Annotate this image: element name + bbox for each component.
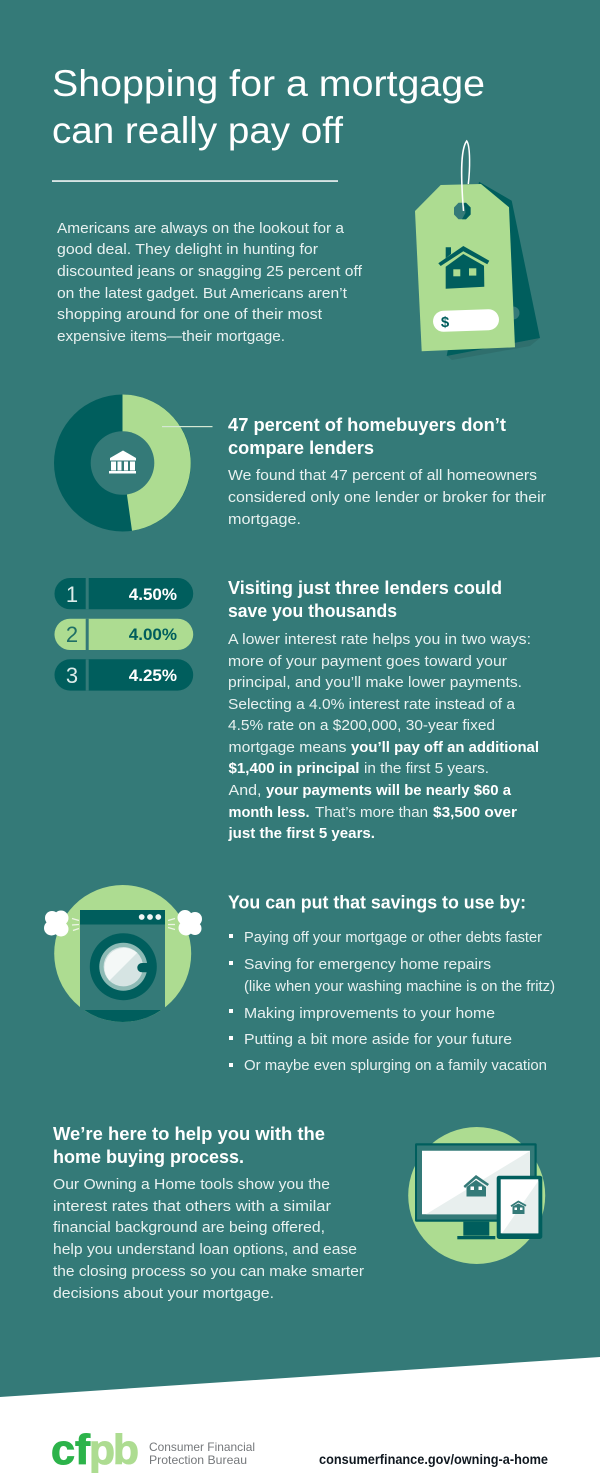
intro text: discounted jeans or snagging 25 percent off: [57, 263, 363, 280]
icon: price tag: [415, 141, 540, 360]
logo: cfpb: c: [51, 1426, 75, 1473]
intro text: Americans are always on the lookout for a: [57, 220, 345, 237]
logo wordmark: Protection Bureau: [149, 1453, 247, 1467]
section: three lenders body: 4.5% rate on a $200,000, 30-year fixed: [228, 717, 495, 734]
savings list: Making improvements to your home: [244, 1005, 495, 1022]
logo: cfpb: p: [89, 1426, 115, 1473]
section: three lenders body: more of your payment goes toward your: [228, 653, 507, 670]
dollar field: [433, 309, 499, 332]
intro text: shopping around for one of their most: [57, 306, 323, 323]
section: three lenders body: mortgage means: [228, 739, 346, 756]
savings list: Putting a bit more aside for your future: [244, 1031, 512, 1048]
icon: computer and tablet: [408, 1127, 545, 1264]
icon: bank: [109, 450, 136, 474]
section: help heading: We’re here to help you with the: [53, 1124, 325, 1144]
section: help heading: [53, 1124, 325, 1167]
section: help body: the closing process so you can make smarter: [53, 1263, 364, 1280]
section: help body: financial background are being offered,: [53, 1219, 325, 1236]
section: three lenders body: your payments will be nearly $60 a: [266, 782, 512, 799]
logo: cfpb: [51, 1426, 139, 1473]
pill 2: 4.00%: [129, 625, 177, 644]
intro text: on the latest gadget. But Americans aren’t: [57, 285, 348, 302]
savings list: Or maybe even splurging on a family vacation: [244, 1057, 547, 1074]
section: three lenders heading: [228, 578, 502, 621]
website url: consumerfinance.gov/owning-a-home: [319, 1452, 548, 1467]
house on tablet: [510, 1200, 526, 1214]
section: three lenders body: $1,400 in principal: [228, 760, 360, 777]
section: three lenders body: A lower interest rate helps you in two ways:: [228, 631, 531, 648]
logo: cfpb: b: [113, 1426, 139, 1473]
section: three lenders body: And,: [228, 782, 262, 799]
house on monitor: [464, 1175, 489, 1196]
savings list: (like when your washing machine is on the fritz): [244, 978, 555, 995]
section: help body: Our Owning a Home tools show you the: [53, 1176, 330, 1193]
pill 3: [54, 659, 193, 691]
section: 47 percent heading: compare lenders: [228, 438, 374, 458]
pill 2: [54, 619, 193, 650]
logo wordmark: [149, 1440, 255, 1467]
savings list: Paying off your mortgage or other debts faster: [244, 929, 542, 946]
steam clouds: [44, 910, 202, 936]
section: three lenders body: Selecting a 4.0% interest rate instead of a: [228, 696, 516, 713]
section: three lenders body: just the first 5 years.: [227, 825, 375, 842]
section: three lenders body: That’s more than: [315, 804, 428, 821]
intro text: good deal. They delight in hunting for: [57, 241, 318, 258]
title: [52, 63, 485, 151]
section: three lenders body: month less.: [228, 804, 310, 821]
section: help body: interest rates that others with a similar: [53, 1198, 331, 1215]
section: three lenders body: $3,500 over: [433, 804, 517, 821]
pill 1: 1: [66, 582, 78, 607]
section: 47 percent heading: 47 percent of homebuyers don’t: [228, 415, 506, 435]
icon: house on tag: [438, 246, 489, 289]
intro text: expensive items—their mortgage.: [57, 328, 285, 345]
savings heading: You can put that savings to use by:: [228, 892, 526, 912]
section: help body: help you understand loan options, and ease: [53, 1241, 357, 1258]
section: three lenders heading: Visiting just three lenders could: [228, 578, 502, 598]
pill 3: 3: [66, 663, 78, 688]
section: three lenders body: [227, 631, 539, 842]
logo wordmark: Consumer Financial: [149, 1440, 255, 1454]
pill 2: 2: [66, 622, 78, 647]
dollar field: $: [441, 314, 450, 331]
section: three lenders body: in the first 5 years.: [364, 760, 489, 777]
section: 47 percent body: [228, 467, 546, 528]
title: Shopping for a mortgage: [52, 63, 485, 104]
section: 47 percent heading: [228, 415, 506, 458]
section: 47 percent body: mortgage.: [228, 511, 301, 528]
intro text: [57, 220, 363, 345]
section: help heading: home buying process.: [53, 1147, 244, 1167]
icon: washing machine: [44, 885, 202, 1022]
pill 1: 4.50%: [129, 585, 177, 604]
section: three lenders body: you’ll pay off an additional: [351, 739, 539, 756]
section: 47 percent body: considered only one lender or broker for their: [228, 489, 546, 506]
rate pills: [54, 578, 193, 691]
savings list: [229, 929, 555, 1074]
section: 47 percent body: We found that 47 percent of all homeowners: [228, 467, 537, 484]
donut chart: 47 percent: [54, 394, 191, 532]
footer band: [0, 1357, 600, 1482]
pill 3: 4.25%: [129, 666, 177, 685]
section: help body: decisions about your mortgage.: [53, 1285, 274, 1302]
section: help body: [53, 1176, 364, 1302]
title: can really pay off: [52, 110, 344, 151]
section: three lenders body: principal, and you’ll make lower payments.: [228, 674, 522, 691]
logo: cfpb: f: [75, 1426, 91, 1473]
section: three lenders heading: save you thousands: [228, 601, 397, 621]
savings list: Saving for emergency home repairs: [244, 956, 491, 973]
pill 1: [54, 578, 193, 609]
